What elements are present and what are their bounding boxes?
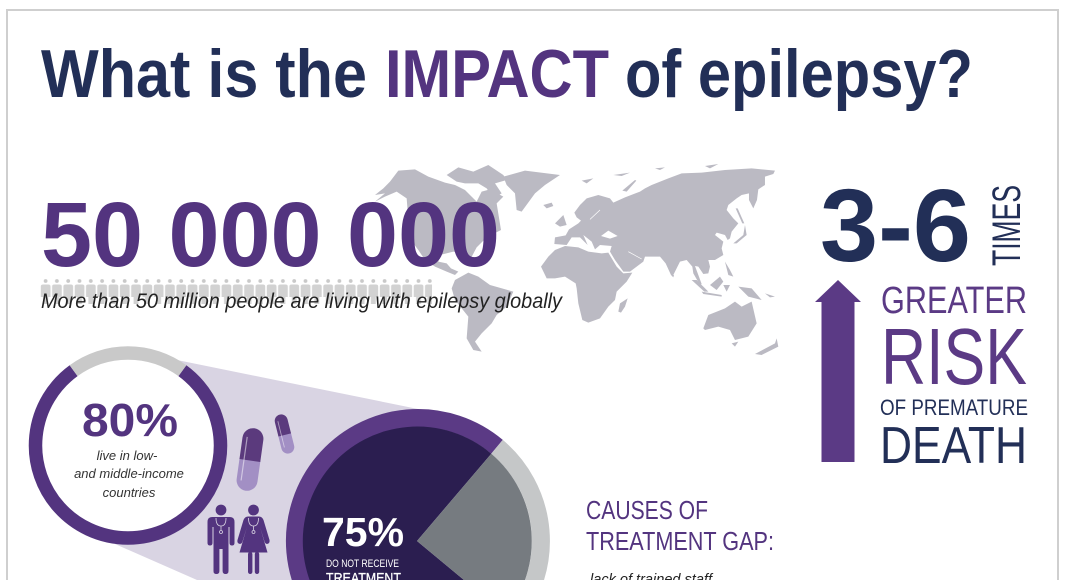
risk wording: RISK [881,312,1027,401]
title [41,36,973,112]
title: IMPACT [385,36,609,112]
icon: large pill [235,427,265,492]
risk wording: GREATER [881,280,1027,322]
panel: causes of treatment gap [586,497,774,580]
80 percent caption: and middle-income [74,466,184,481]
times label: TIMES [985,185,1029,266]
80 percent caption: countries [103,485,156,500]
title: of epilepsy? [625,36,973,112]
world map [375,164,778,355]
connector band [115,360,418,580]
subtitle: More than 50 million people are living with epilepsy globally [41,290,563,313]
icon: female doctor [237,505,270,574]
75 percent value: 75% [322,509,404,555]
big number: 50 000 000 [41,184,500,286]
risk wording [880,280,1028,475]
75 percent caption: DO NOT RECEIVE [326,558,399,570]
map: the Americas and Greenland [375,165,560,352]
panel: 75 percent pie [286,409,550,580]
80 percent caption: live in low- [97,448,158,463]
75 percent caption [326,558,401,580]
risk multiplier: 3-6 [820,168,971,283]
title: What is the [41,36,367,112]
panel: premature death risk [815,168,1029,475]
icon: small pill [273,413,296,455]
map: Eurasia, Africa and Oceania [541,164,778,355]
people row [40,278,432,305]
icon: up arrow [815,280,861,462]
panel: 80 percent donut [35,353,220,538]
80 percent value: 80% [82,394,178,446]
causes heading: CAUSES OF [586,497,708,525]
80 percent caption [74,448,184,500]
risk wording: DEATH [880,417,1027,475]
icon: male doctor [208,505,234,574]
risk wording: OF PREMATURE [880,395,1028,420]
causes heading [586,497,774,556]
